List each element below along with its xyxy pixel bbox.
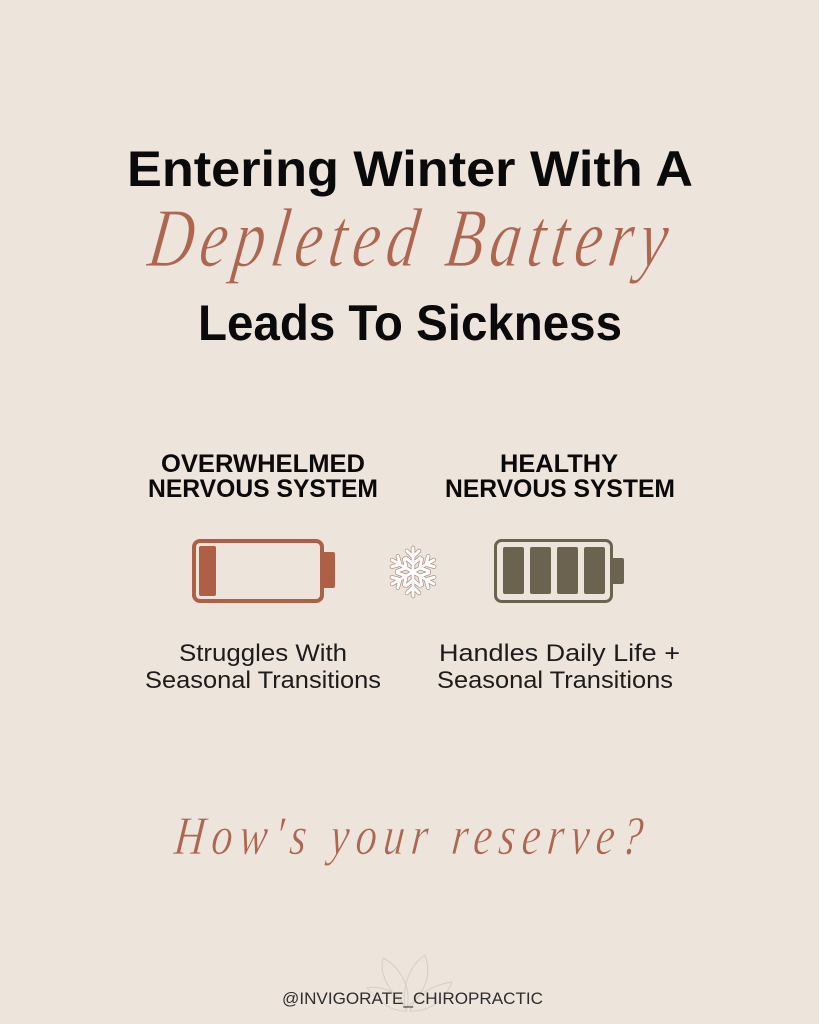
panel: healthy nervous system — [437, 450, 680, 694]
heading: overwhelmed: NERVOUS SYSTEM — [148, 475, 378, 503]
text: struggles: Seasonal Transitions — [145, 667, 381, 694]
title line 3: Leads To Sickness — [198, 295, 622, 351]
icon: snowflake — [389, 548, 437, 596]
icon: leaf logo — [367, 955, 452, 1011]
footer handle: @INVIGORATE_CHIROPRACTIC — [282, 989, 543, 1008]
title line 1: Entering Winter With A — [127, 141, 693, 197]
icon: low battery — [194, 541, 335, 601]
text: handles: Seasonal Transitions — [437, 667, 673, 694]
title script line: Depleted Battery: Depleted Battery — [142, 193, 674, 285]
text: struggles — [145, 640, 381, 694]
heading: healthy: NERVOUS SYSTEM — [445, 475, 675, 503]
icon: full battery — [496, 540, 624, 602]
heading: healthy: HEALTHY — [500, 450, 618, 478]
panel: overwhelmed nervous system — [145, 450, 381, 694]
title — [127, 141, 693, 351]
heading: healthy — [445, 450, 675, 503]
text: handles: Handles Daily Life + — [439, 640, 680, 667]
heading: overwhelmed — [148, 450, 378, 503]
text: struggles: Struggles With — [179, 640, 347, 667]
text: handles — [437, 640, 680, 694]
heading: overwhelmed: OVERWHELMED — [161, 450, 365, 478]
closing question: How's your reserve? — [171, 805, 647, 866]
